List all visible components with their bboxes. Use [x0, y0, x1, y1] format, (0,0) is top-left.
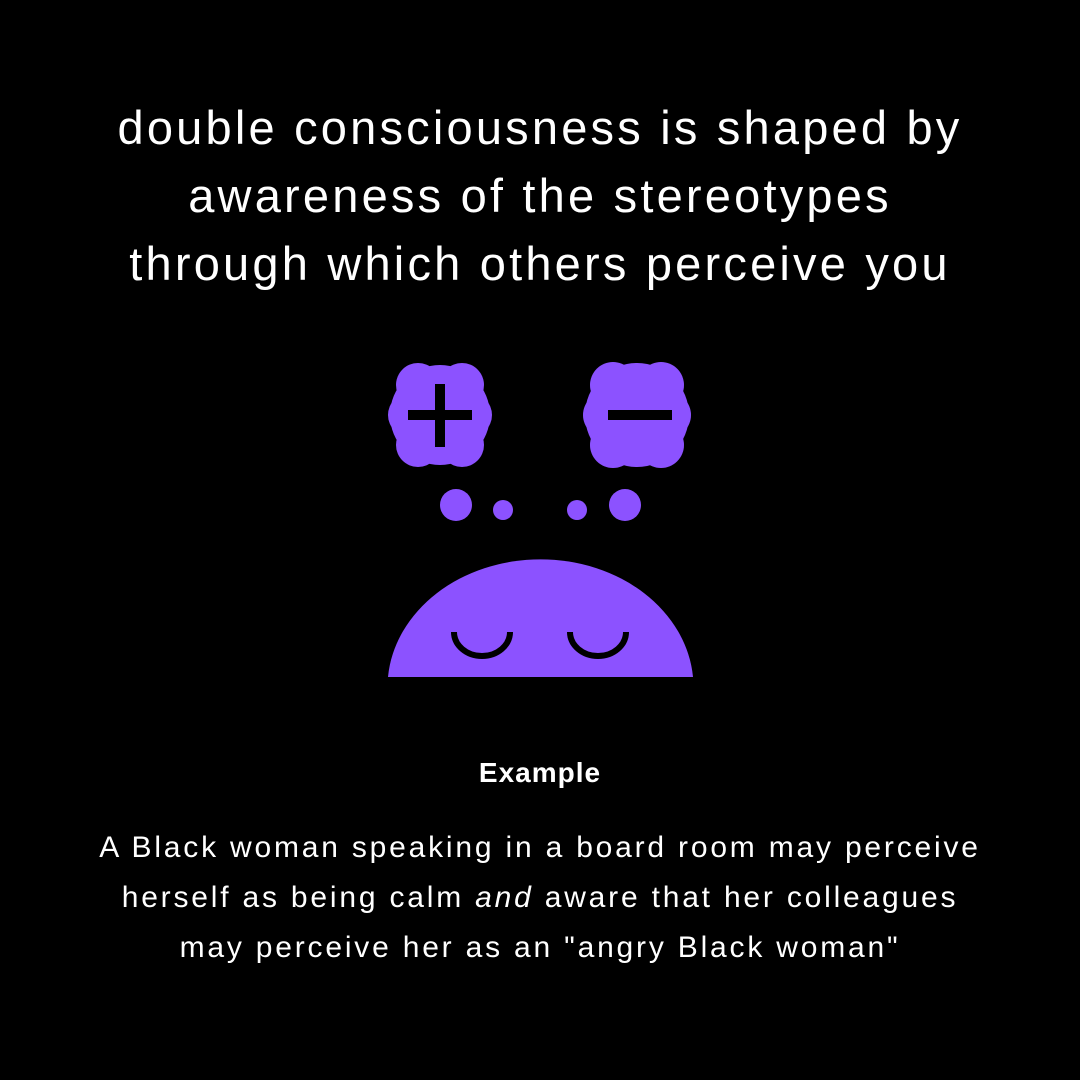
- icon: plus thought cloud: [388, 363, 492, 467]
- title: through which others perceive you: [129, 237, 951, 290]
- title: double consciousness is shaped by: [117, 101, 963, 154]
- title: awareness of the stereotypes: [188, 169, 892, 222]
- example text: may perceive her as an "angry Black woman": [180, 931, 900, 964]
- example text: A Black woman speaking in a board room may perceive: [99, 831, 981, 864]
- example text: [99, 831, 981, 964]
- title: [117, 101, 963, 290]
- example text: herself as being calm and aware that her colleagues: [122, 881, 958, 914]
- icon: minus thought cloud: [583, 362, 691, 468]
- head with closed eyes: [388, 559, 693, 677]
- heading: Example: Example: [479, 757, 601, 788]
- thought bubble dots: [440, 489, 641, 521]
